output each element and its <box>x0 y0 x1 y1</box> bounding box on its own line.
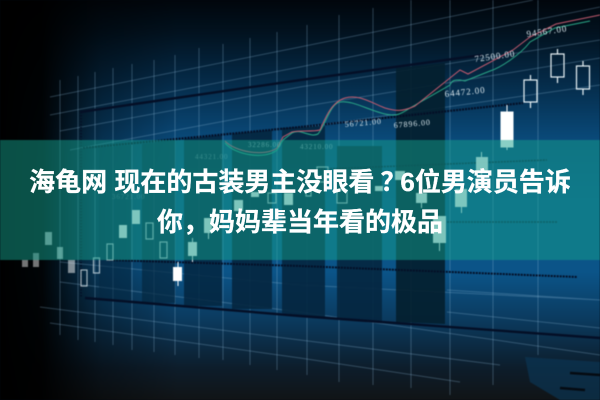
price labels: 44321.00 <box>195 153 228 161</box>
green moving average line <box>225 21 590 155</box>
price labels: 72500.00 <box>474 48 516 64</box>
teal title band <box>0 140 600 260</box>
price labels: 32286.00 <box>248 141 281 149</box>
price labels: 36721.00 <box>112 193 145 201</box>
price labels <box>112 23 568 201</box>
bottom right patch <box>525 357 600 400</box>
outlined candlesticks <box>81 49 590 286</box>
price labels: 43210.00 <box>300 143 333 151</box>
title: 海龟网 现在的古装男主没眼看？6位男演员告诉 <box>29 167 571 197</box>
red moving average line <box>225 15 600 153</box>
filled candlesticks <box>22 105 514 286</box>
title <box>29 167 571 237</box>
price labels: 56721.00 <box>344 117 382 129</box>
price labels: 94567.00 <box>526 23 568 39</box>
dark chart panels <box>99 63 445 324</box>
title: 你，妈妈辈当年看的极品 <box>157 207 443 237</box>
price labels: 64472.00 <box>444 85 486 99</box>
price labels: 67896.00 <box>393 118 431 130</box>
chart frame lines <box>80 55 600 338</box>
